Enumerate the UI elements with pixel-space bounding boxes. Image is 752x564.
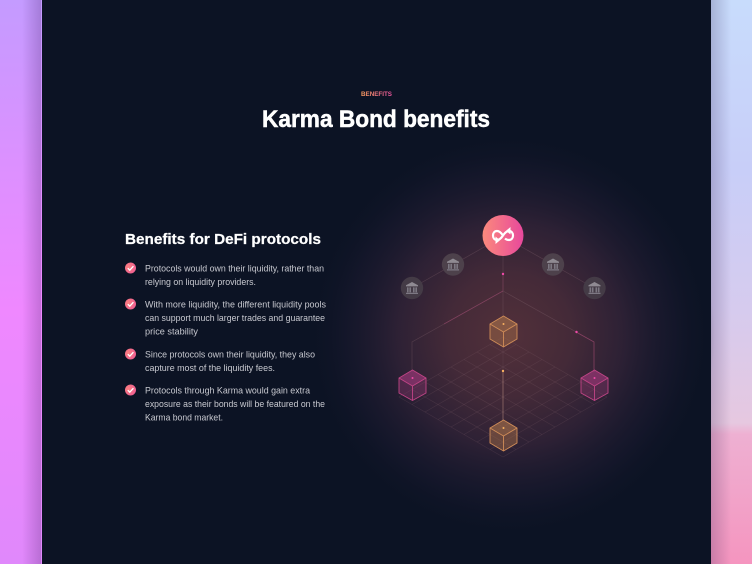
subheading: Benefits for DeFi protocols <box>125 231 321 248</box>
title: Karma Bond benefits <box>262 106 490 133</box>
benefit 3: capture most of the liquidity fees. <box>145 363 275 374</box>
isometric grid <box>399 337 607 457</box>
highlighted connector segments <box>444 274 594 420</box>
benefit 3: Since protocols own their liquidity, they also <box>145 350 315 360</box>
radial glow behind diagram <box>300 125 720 545</box>
benefit 2: With more liquidity, the different liquidity pools <box>145 300 326 310</box>
icon: pink cube left <box>399 370 426 400</box>
icon: central swap node <box>482 215 524 256</box>
background: right gradient strip <box>711 0 752 564</box>
benefit 1 <box>125 262 324 288</box>
panel: benefits list <box>125 231 326 424</box>
chart: isometric network diagram <box>399 215 608 457</box>
benefit 2: price stability <box>145 326 198 338</box>
benefit 1: relying on liquidity providers. <box>145 277 256 288</box>
benefit 2: can support much larger trades and guarantee <box>145 313 325 324</box>
section label: BENEFITS <box>361 91 393 98</box>
background: left gradient strip <box>0 0 42 564</box>
benefit 1: Protocols would own their liquidity, rather than <box>145 264 324 274</box>
icon: orange cube bottom <box>490 420 517 451</box>
benefit 4: Protocols through Karma would gain extra <box>145 386 311 396</box>
icon: orange cube top <box>490 316 517 347</box>
benefit 4: Karma bond market. <box>145 412 223 424</box>
signal dots <box>502 273 578 372</box>
connector lines <box>412 246 594 420</box>
benefit 2 <box>125 298 326 338</box>
icon: pink cube right <box>581 370 608 400</box>
benefit 3 <box>125 348 315 374</box>
benefit 4 <box>125 384 325 424</box>
benefit 4: exposure as their bonds will be featured on the <box>145 399 325 410</box>
icon: bank nodes <box>401 253 606 299</box>
